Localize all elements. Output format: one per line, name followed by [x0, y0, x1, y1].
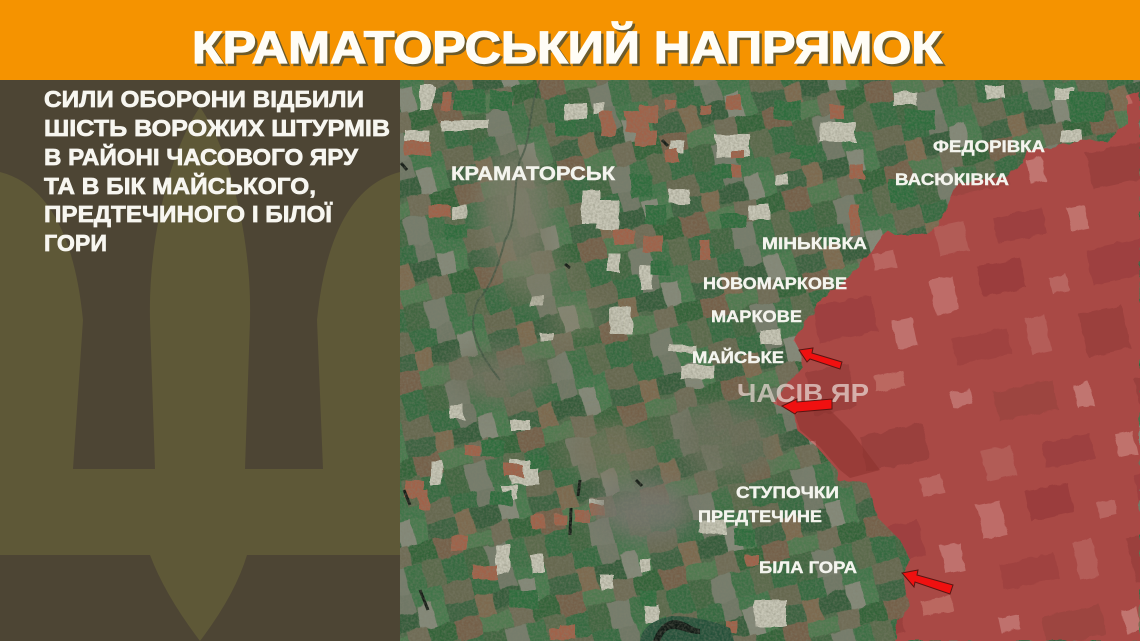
label: Chasiv Yar: ЧАСІВ ЯР: [737, 378, 869, 408]
label: Kramatorsk: КРАМАТОРСЬК: [451, 164, 615, 185]
reservoir water: [653, 620, 700, 641]
panel text: situation summary: СИЛИ ОБОРОНИ ВІДБИЛИ: [44, 86, 364, 112]
satellite map: [380, 60, 1140, 641]
label: Fedorivka: ФЕДОРІВКА: [933, 137, 1045, 156]
panel text: situation summary: [44, 86, 390, 256]
panel text: situation summary: ГОРИ: [44, 230, 107, 256]
panel text: situation summary: ТА В БІК МАЙСЬКОГО,: [44, 172, 316, 199]
label: Predtechyne: ПРЕДТЕЧИНЕ: [698, 507, 822, 526]
reservoir: [640, 616, 734, 641]
label: Bila Hora: БІЛА ГОРА: [759, 558, 857, 577]
left panel background: [0, 80, 400, 641]
title: КРАМАТОРСЬКИЙ НАПРЯМОК: [192, 22, 943, 73]
panel text: situation summary: ПРЕДТЕЧИНОГО І БІЛОЇ: [44, 201, 333, 227]
arrow: attack toward Maiske: [799, 348, 842, 369]
arrow: attack at Chasiv Yar: [782, 399, 832, 414]
label: Vasiukivka: ВАСЮКІВКА: [895, 170, 1009, 189]
header banner: [0, 0, 1140, 80]
fine image grain: [400, 80, 1140, 641]
trident emblem: [0, 107, 400, 641]
panel text: situation summary: ШІСТЬ ВОРОЖИХ ШТУРМІВ: [44, 115, 390, 141]
ponds: [401, 140, 668, 610]
title: КРАМАТОРСЬКИЙ НАПРЯМОК: [194, 24, 945, 76]
arrow: attack toward Bila Hora: [902, 570, 953, 594]
label: Maiske: МАЙСЬКЕ: [692, 348, 784, 367]
farmland texture: [380, 60, 1140, 641]
label: Stupochky: СТУПОЧКИ: [736, 483, 839, 502]
urban and terrain tones: [450, 147, 780, 540]
occupied territory: [773, 93, 1140, 641]
river: [473, 80, 540, 380]
label: Markove: МАРКОВЕ: [711, 307, 802, 326]
label: Minkivka: МІНЬКІВКА: [762, 234, 867, 253]
map labels: [451, 137, 1045, 577]
darker ground along the front line: [795, 410, 880, 478]
label: Novomarkove: НОВОМАРКОВЕ: [703, 274, 847, 293]
panel text: situation summary: В РАЙОНІ ЧАСОВОГО ЯРУ: [44, 143, 359, 170]
